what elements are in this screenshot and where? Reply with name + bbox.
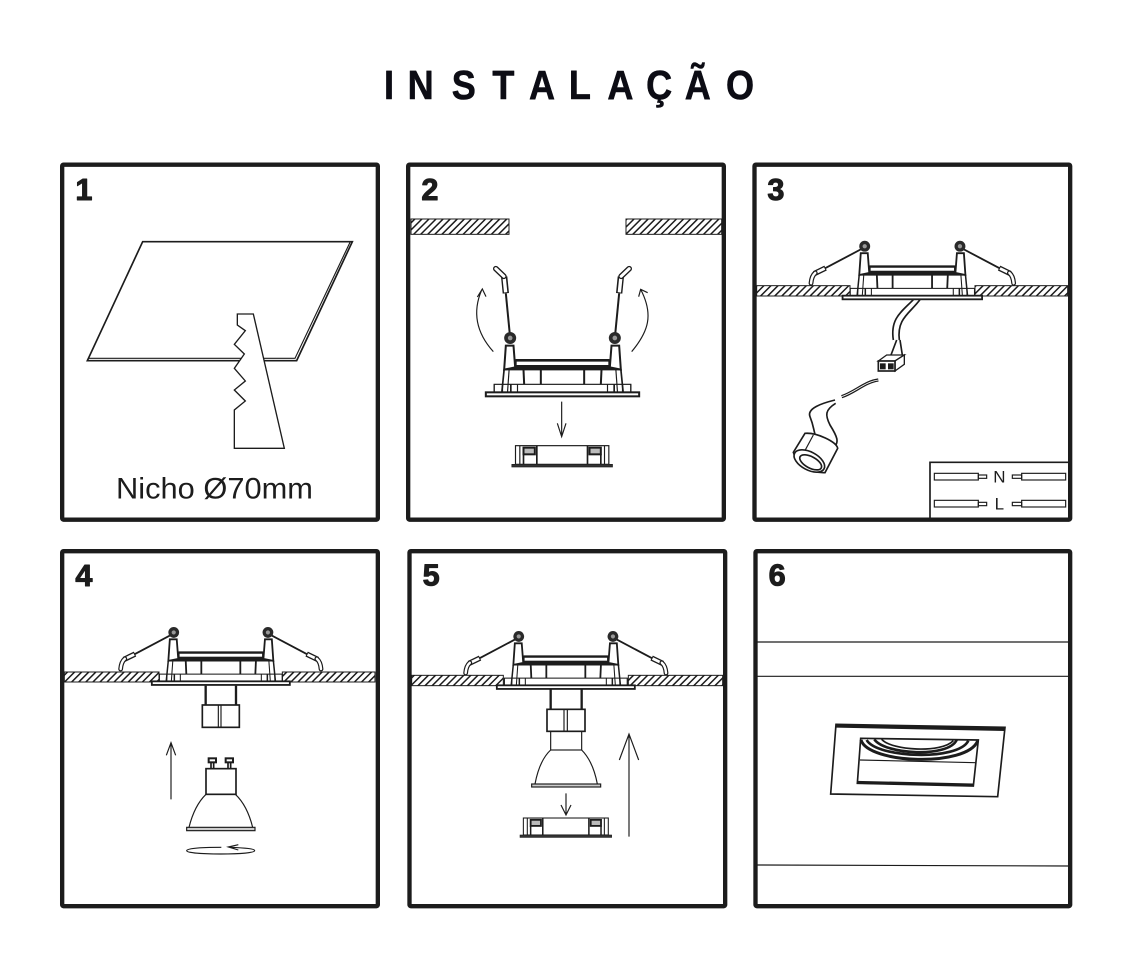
ceiling lines (757, 642, 1069, 866)
ceiling hatch right (626, 219, 722, 234)
panel 2: removing the trim (408, 165, 724, 520)
arrow: big up (619, 734, 639, 837)
step number 4: 4 (75, 559, 92, 593)
light fixture with raised springs (486, 269, 639, 396)
panel 5: fitting the trim (409, 551, 725, 906)
icon: saw (234, 314, 284, 448)
trim ring (512, 446, 612, 467)
label L: L (995, 495, 1004, 514)
socket (202, 686, 239, 727)
arrow: right spring up (632, 289, 648, 352)
label N: N (993, 467, 1005, 486)
arrow: down (557, 402, 566, 437)
finished fixture (831, 724, 1005, 797)
step number 5: 5 (423, 559, 440, 593)
lamp installed in socket (532, 689, 601, 787)
ceiling hatch (757, 286, 1068, 296)
arrow: small down (561, 793, 571, 815)
panel 3: wiring (754, 165, 1070, 520)
caption: Nicho Ø70mm (116, 472, 313, 505)
title: INSTALAÇÃO (384, 62, 754, 109)
ceiling hatch left (411, 219, 509, 234)
ceiling hatch (412, 675, 723, 686)
panel 1: cutting the ceiling niche (62, 165, 378, 520)
wiring legend (930, 462, 1068, 518)
step number 3: 3 (767, 173, 784, 207)
icon: GU10 lamp (187, 758, 255, 831)
step number 6: 6 (769, 559, 786, 593)
arrow: left spring up (477, 289, 493, 352)
light fixture (121, 627, 321, 685)
step number 1: 1 (75, 173, 92, 207)
supply cable and connector (878, 300, 920, 371)
arrow: up (166, 743, 176, 799)
light fixture (811, 241, 1014, 299)
trim ring (520, 818, 612, 837)
panel 4: inserting the lamp (62, 551, 378, 906)
light fixture (466, 631, 666, 689)
wires to socket (810, 380, 878, 447)
ceiling hatch (64, 672, 375, 682)
icon: GU10 socket (790, 433, 838, 477)
ceiling panel (87, 242, 352, 361)
step number 2: 2 (421, 173, 438, 207)
arrow: rotate (187, 845, 255, 854)
panel 6: finished installation (755, 551, 1070, 906)
